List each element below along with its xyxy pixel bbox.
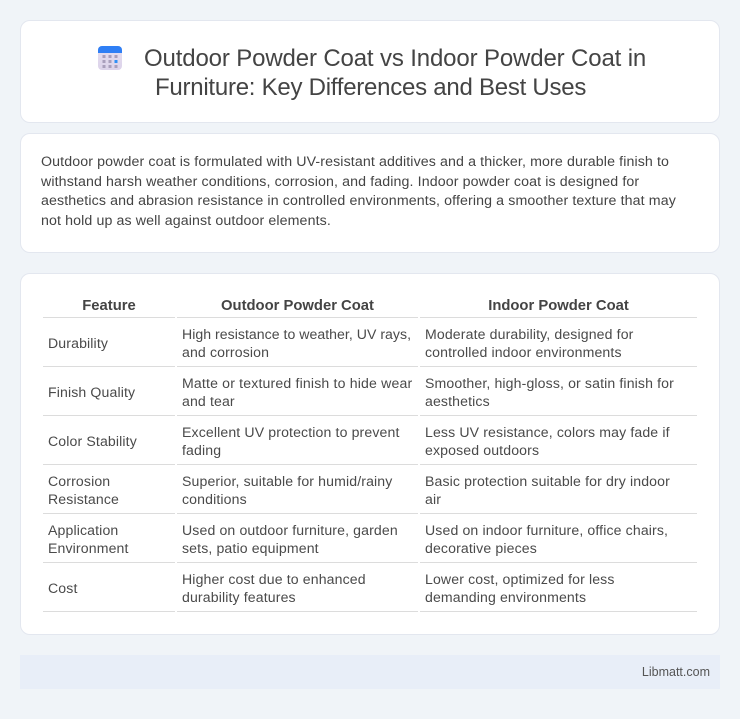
table row: finish quality: Finish Quality bbox=[48, 384, 135, 400]
footer bbox=[20, 655, 720, 689]
title: Outdoor Powder Coat vs Indoor Powder Coat in bbox=[144, 45, 646, 72]
panel: introduction bbox=[20, 133, 720, 253]
table row: corrosion resistance: air bbox=[425, 491, 441, 507]
table row: cost: Higher cost due to enhanced bbox=[182, 571, 366, 587]
table row: finish quality: Smoother, high-gloss, or satin finish for bbox=[425, 375, 674, 391]
table header: Indoor Powder Coat bbox=[488, 298, 629, 314]
text block: introduction bbox=[41, 154, 676, 229]
table row: application environment: Application bbox=[48, 522, 118, 538]
table header: Feature bbox=[82, 298, 136, 314]
table row: finish quality: aesthetics bbox=[425, 393, 490, 409]
panel: comparison table bbox=[20, 273, 720, 635]
table row: corrosion resistance: Basic protection suitable for dry indoor bbox=[425, 473, 670, 489]
title: Furniture: Key Differences and Best Uses bbox=[155, 74, 586, 101]
table row: durability: High resistance to weather, UV rays, bbox=[182, 326, 411, 342]
table row: application environment: sets, patio equipment bbox=[182, 540, 319, 556]
table row: cost: Cost bbox=[48, 580, 78, 596]
text block: introduction: withstand harsh weather conditions, corrosion, and fading. Indoor powder coat is designed for bbox=[41, 174, 639, 190]
table row: application environment: Environment bbox=[48, 540, 129, 556]
table row: finish quality bbox=[43, 375, 697, 416]
text block: introduction: not hold up as well against outdoor elements. bbox=[41, 213, 331, 229]
table row: corrosion resistance bbox=[43, 473, 697, 514]
panel: header bbox=[20, 20, 720, 123]
icon: calendar bbox=[98, 46, 122, 70]
table header: Outdoor Powder Coat bbox=[221, 298, 374, 314]
text block: introduction: aesthetics and abrasion resistance in controlled environments, offering a smoother texture that may bbox=[41, 193, 676, 209]
title bbox=[144, 45, 646, 101]
table row: durability: and corrosion bbox=[182, 344, 269, 360]
table row: finish quality: Matte or textured finish to hide wear bbox=[182, 375, 412, 391]
table row: corrosion resistance: Resistance bbox=[48, 491, 119, 507]
table row: application environment: decorative pieces bbox=[425, 540, 537, 556]
footer: Libmatt.com bbox=[642, 665, 710, 679]
table row: finish quality: and tear bbox=[182, 393, 235, 409]
table row: color stability: fading bbox=[182, 442, 221, 458]
table row: color stability: exposed outdoors bbox=[425, 442, 539, 458]
table row: durability: controlled indoor environments bbox=[425, 344, 622, 360]
table row: color stability bbox=[43, 424, 697, 465]
text block: introduction: Outdoor powder coat is formulated with UV-resistant additives and a thicker, more durable finish to bbox=[41, 154, 669, 170]
table row: application environment: Used on indoor furniture, office chairs, bbox=[425, 522, 668, 538]
table row: corrosion resistance: conditions bbox=[182, 491, 247, 507]
table row: application environment: Used on outdoor furniture, garden bbox=[182, 522, 398, 538]
table row: cost: durability features bbox=[182, 589, 296, 605]
table row: cost: demanding environments bbox=[425, 589, 586, 605]
table header bbox=[43, 298, 697, 318]
table row: cost bbox=[43, 571, 697, 612]
table row: durability bbox=[43, 326, 697, 367]
table row: durability: Durability bbox=[48, 335, 108, 351]
table row: color stability: Excellent UV protection to prevent bbox=[182, 424, 400, 440]
table row: durability: Moderate durability, designed for bbox=[425, 326, 634, 342]
table row: color stability: Color Stability bbox=[48, 433, 137, 449]
table row: cost: Lower cost, optimized for less bbox=[425, 571, 615, 587]
table row: corrosion resistance: Corrosion bbox=[48, 473, 110, 489]
table row: corrosion resistance: Superior, suitable for humid/rainy bbox=[182, 473, 392, 489]
table row: color stability: Less UV resistance, colors may fade if bbox=[425, 424, 670, 440]
table row: application environment bbox=[43, 522, 697, 563]
